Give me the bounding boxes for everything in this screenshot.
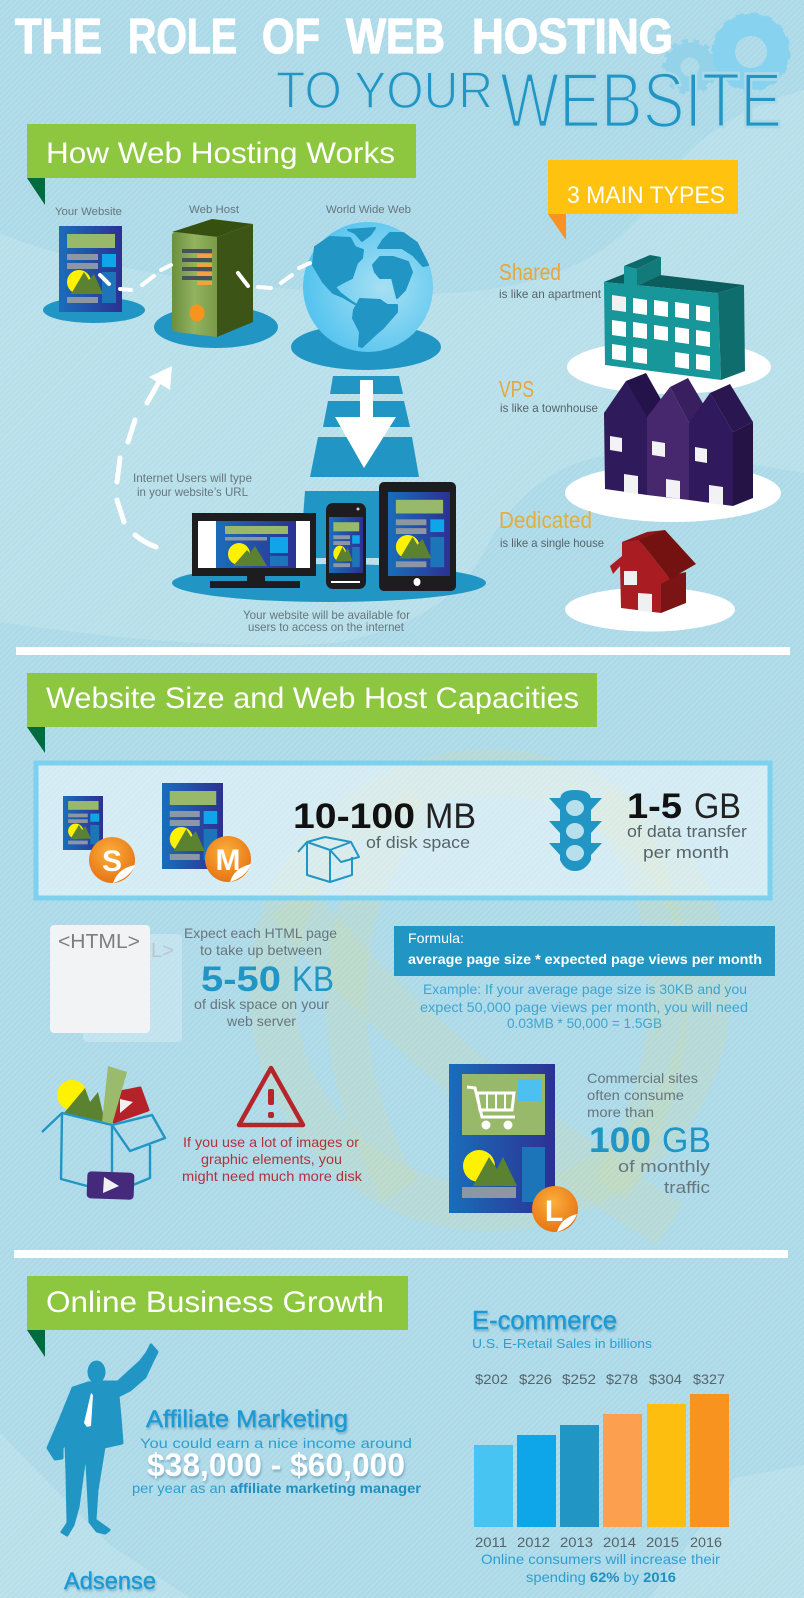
- icon: single house: [565, 530, 735, 632]
- text: commercial traffic: of monthly: [618, 1157, 711, 1176]
- text: online consumers: [481, 1551, 720, 1585]
- text: commercial traffic: GB: [662, 1121, 711, 1160]
- text: commercial traffic: Commercial sites: [587, 1070, 698, 1086]
- text: commercial traffic: more than: [587, 1104, 654, 1120]
- medium site icon: [162, 783, 251, 882]
- stat: data transfer: of data transfer: [627, 822, 747, 841]
- text: formula example: [420, 981, 748, 1031]
- subtitle: to your website: [276, 56, 782, 144]
- panel: capacities: [36, 763, 770, 898]
- caption: internet users will type: in your website’s URL: [137, 485, 248, 499]
- flow bands: [300, 376, 430, 558]
- title: the role of web hosting: [15, 10, 673, 64]
- heading: e-commerce: E-commerce: [472, 1305, 617, 1335]
- icon: large commercial page: [449, 1064, 578, 1232]
- text: formula example: 0.03MB * 50,000 = 1.5GB: [507, 1015, 662, 1031]
- phone: [326, 503, 366, 589]
- stat: data transfer: [627, 787, 747, 862]
- icon: open box: [298, 837, 359, 882]
- label: web host: Web Host: [189, 204, 239, 216]
- formula box: Formula:: [408, 930, 464, 946]
- small site icon: [63, 796, 135, 883]
- title: the role of web hosting: HOSTING: [472, 10, 673, 64]
- text: images warning: might need much more disk: [182, 1168, 363, 1184]
- tablet: [379, 482, 456, 591]
- heading: e-commerce: [472, 1305, 653, 1351]
- text: commercial traffic: [587, 1070, 711, 1197]
- text: html page size: 5-50: [201, 960, 281, 999]
- title: the role of web hosting: OF: [262, 10, 320, 64]
- formula box: [394, 926, 775, 976]
- text: commercial traffic: often consume: [587, 1087, 684, 1103]
- bar values: $304: [649, 1371, 682, 1387]
- decorative gears: [665, 16, 787, 92]
- year labels: 2011: [475, 1534, 507, 1550]
- type: shared: Shared: [499, 259, 561, 285]
- type: shared: [499, 259, 602, 301]
- text: affiliate marketing: [132, 1406, 422, 1496]
- title: the role of web hosting: THE: [15, 10, 102, 64]
- heading: 3 main types: [548, 160, 738, 240]
- text: html page size: to take up between: [200, 942, 322, 958]
- heading: 3 main types: 3 MAIN TYPES: [567, 182, 725, 209]
- heading: online business growth: Online Business Growth: [46, 1286, 384, 1319]
- heading: how web hosting works: How Web Hosting Works: [46, 137, 395, 170]
- title: the role of web hosting: ROLE: [128, 10, 237, 64]
- icon: web host server: [154, 219, 278, 348]
- monitor: [192, 513, 316, 588]
- icon: globe world wide web: [291, 222, 441, 370]
- text: html page size: Expect each HTML page: [184, 925, 337, 941]
- year labels: 2012: [517, 1534, 550, 1550]
- caption: website available: users to access on the internet: [248, 620, 405, 634]
- stat: data transfer: 1-5: [627, 787, 682, 826]
- text: html page size: [184, 925, 337, 1029]
- text: online consumers: Online consumers will increase their: [481, 1551, 720, 1567]
- type: vps: [499, 376, 598, 415]
- cart: [467, 1087, 515, 1128]
- text: affiliate marketing: You could earn a nice income around: [140, 1435, 412, 1451]
- type: dedicated: Dedicated: [499, 507, 592, 533]
- text: commercial traffic: traffic: [664, 1178, 711, 1197]
- icon: html pages: <HTML>: [58, 931, 140, 953]
- stat: disk space: MB: [425, 797, 476, 836]
- bar chart: e-retail sales: [474, 1371, 729, 1550]
- arrow: dashed link website to host: [100, 265, 171, 290]
- bar values: $252: [562, 1371, 596, 1387]
- text: affiliate marketing: Affiliate Marketing: [146, 1406, 348, 1433]
- year labels: 2015: [646, 1534, 679, 1550]
- year labels: 2013: [560, 1534, 593, 1550]
- formula box: average page size * expected page views per month: [408, 951, 762, 967]
- icon: townhouses: [565, 373, 781, 522]
- arrow: down to devices: [335, 380, 396, 468]
- text: html page size: of disk space on your: [194, 996, 329, 1012]
- arrow: dashed link host to web: [238, 263, 310, 288]
- text: formula example: expect 50,000 page views per month, you will need: [420, 999, 748, 1015]
- bar values: $278: [606, 1371, 638, 1387]
- icon: website page: [43, 226, 145, 323]
- text: images warning: If you use a lot of images or: [183, 1134, 359, 1150]
- icon: businessman silhouette: [48, 1345, 157, 1535]
- text: commercial traffic: 100: [589, 1121, 651, 1160]
- divider one: [16, 647, 790, 655]
- caption: website available: Your website will be available for: [243, 608, 410, 622]
- heading: how web hosting works: [27, 124, 416, 205]
- icon: html pages: [50, 925, 182, 1042]
- heading: online business growth: [27, 1276, 408, 1357]
- caption: internet users will type: [133, 471, 252, 499]
- bar values: $226: [519, 1371, 552, 1387]
- bar values: $327: [693, 1371, 725, 1387]
- text: affiliate marketing: per year as an affiliate marketing manager: [132, 1480, 422, 1496]
- year labels: [475, 1534, 722, 1550]
- medium site icon: M: [216, 844, 240, 877]
- heading: website size and web host capacities: [27, 673, 597, 753]
- title: the role of web hosting: WEB: [346, 10, 445, 64]
- caption: website available: [243, 608, 410, 634]
- text: online consumers: spending 62% by 2016: [526, 1569, 676, 1585]
- divider two: [14, 1250, 788, 1258]
- stat: data transfer: GB: [694, 787, 741, 826]
- text: images warning: graphic elements, you: [201, 1151, 342, 1167]
- label: world wide web: World Wide Web: [326, 204, 411, 216]
- type: vps: is like a townhouse: [500, 401, 598, 415]
- year labels: 2016: [690, 1534, 722, 1550]
- bar values: [475, 1371, 725, 1387]
- bars: [474, 1394, 729, 1527]
- small site icon: S: [102, 845, 122, 878]
- stat: data transfer: per month: [643, 843, 729, 862]
- icon: warning triangle: [239, 1068, 303, 1125]
- subtitle: to your website: TO YOUR: [276, 62, 493, 120]
- devices: [172, 482, 486, 602]
- type: shared: is like an apartment: [499, 287, 602, 301]
- text: html page size: KB: [292, 960, 334, 999]
- icon: box with media: [42, 1066, 165, 1200]
- stat: disk space: of disk space: [366, 833, 470, 852]
- text: images warning: [182, 1134, 363, 1184]
- arrow: curved dashed users to host: [117, 366, 172, 547]
- type: vps: VPS: [499, 376, 534, 402]
- text: html page size: web server: [226, 1013, 296, 1029]
- stat: disk space: 10-100: [293, 797, 415, 836]
- type: dedicated: is like a single house: [500, 536, 604, 550]
- heading: website size and web host capacities: Website Size and Web Host Capacities: [46, 682, 579, 715]
- label: your website: Your Website: [55, 206, 122, 218]
- heading: e-commerce: U.S. E-Retail Sales in billions: [472, 1336, 653, 1351]
- icon: html pages: L>: [151, 940, 174, 962]
- year labels: 2014: [603, 1534, 636, 1550]
- stat: disk space: [293, 797, 476, 852]
- caption: internet users will type: Internet Users will type: [133, 471, 252, 485]
- heading: adsense: Adsense: [64, 1568, 156, 1595]
- text: formula example: Example: If your average page size is 30KB and you: [423, 981, 747, 997]
- icon: large commercial page: L: [545, 1195, 563, 1228]
- bar values: $202: [475, 1371, 508, 1387]
- icon: traffic light: [549, 790, 602, 871]
- text: affiliate marketing: $38,000 - $60,000: [147, 1447, 405, 1483]
- type: dedicated: [499, 507, 604, 550]
- icon: apartment building: [567, 255, 771, 394]
